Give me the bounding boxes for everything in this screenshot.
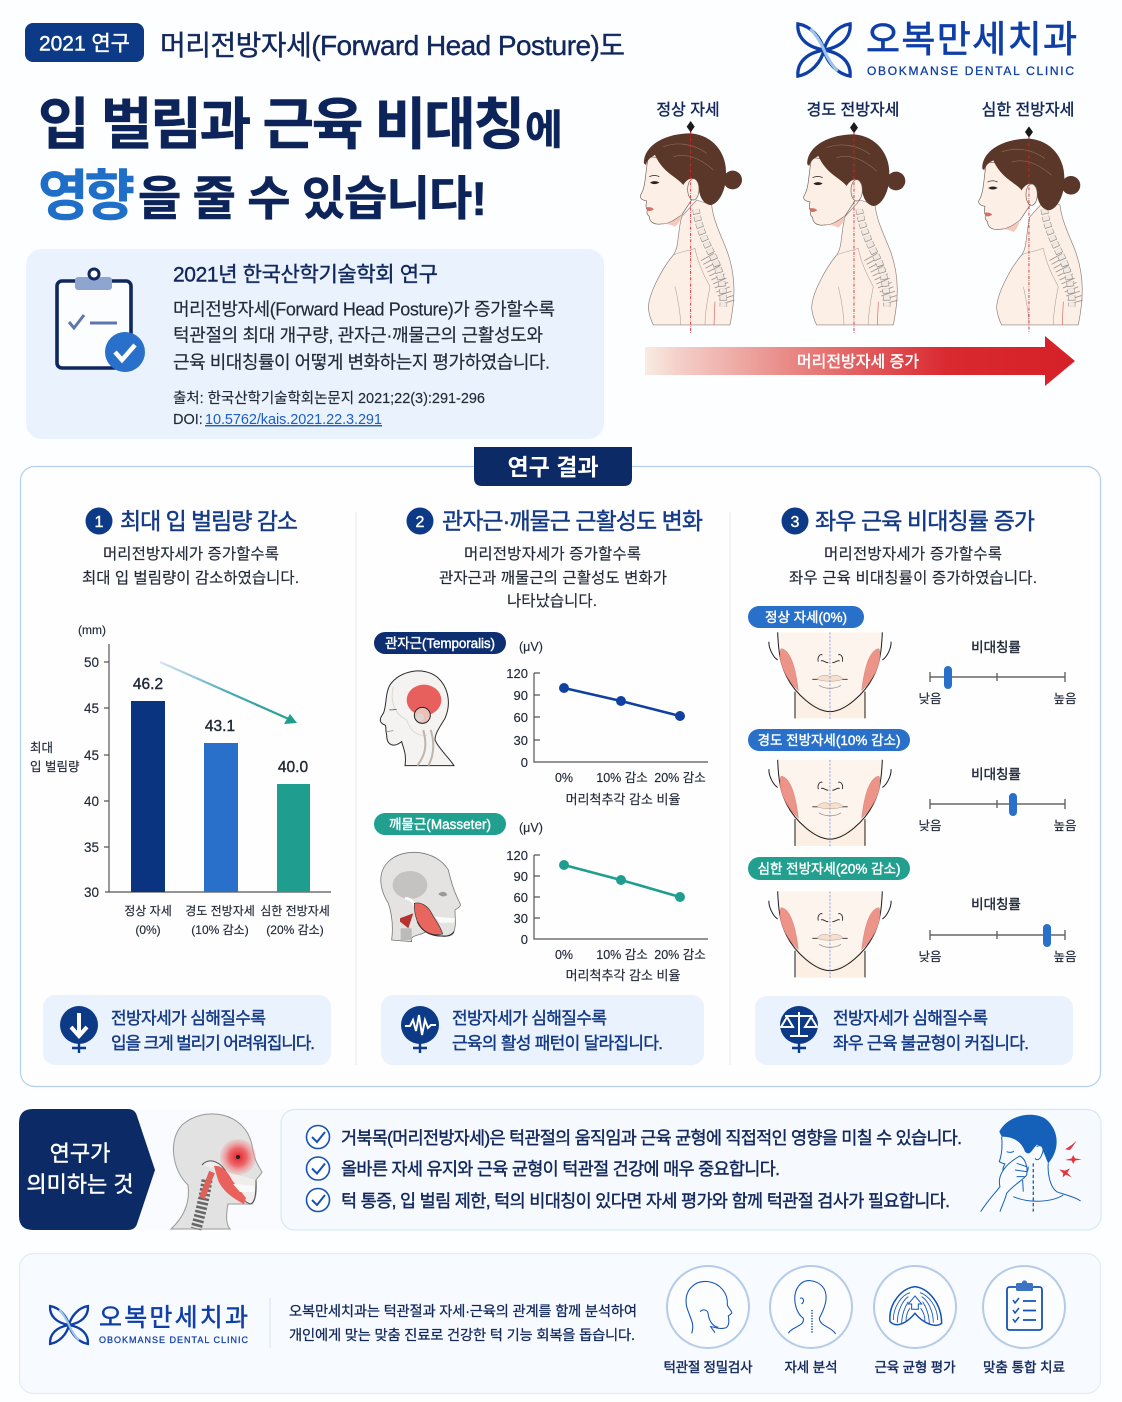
line chart: masseter: (μV) <box>519 821 543 835</box>
service: posture analysis <box>770 1266 852 1375</box>
bar chart: (20% 감소) <box>266 923 324 937</box>
line chart: masseter: 머리척추각 감소 비율 <box>566 968 680 983</box>
panel: takeaways <box>281 1110 1101 1230</box>
callout <box>43 995 331 1065</box>
heading: 최대 입 벌림량 감소 <box>120 508 298 534</box>
bar chart: 46.2 <box>133 676 163 693</box>
line chart: temporalis: (μV) <box>519 640 543 654</box>
pill <box>748 729 910 751</box>
callout: 전방자세가 심해질수록 <box>833 1009 988 1028</box>
icon: down arrow <box>60 1006 98 1053</box>
logo: top right: OBOKMANSE DENTAL CLINIC <box>867 64 1074 78</box>
asymmetry scale: 낮음 <box>918 692 942 706</box>
bar chart: (10% 감소) <box>191 923 249 937</box>
line chart: temporalis: 20% 감소 <box>654 771 706 785</box>
checklist <box>306 1126 962 1212</box>
label: 경도 전방자세: 경도 전방자세 <box>807 101 899 119</box>
face <box>769 891 891 978</box>
arrow: decreasing trend <box>160 662 297 724</box>
subtitle: 머리전방자세(Forward Head Posture)도 <box>160 30 625 61</box>
logo: footer: OBOKMANSE DENTAL CLINIC <box>99 1335 248 1345</box>
bar chart: 45 <box>84 748 99 763</box>
service: integrated treatment: 맞춤 통합 치료 <box>983 1360 1065 1375</box>
service: muscle balance <box>874 1266 956 1375</box>
pill: temporalis: 관자근(Temporalis) <box>385 636 495 651</box>
pill: 경도 전방자세(10% 감소) <box>758 733 900 748</box>
asymmetry scale <box>918 767 1077 833</box>
main title: 입 벌림과 근육 비대칭 <box>38 93 525 156</box>
bar chart: 43.1 <box>205 718 235 735</box>
bar chart: (0%) <box>135 923 161 937</box>
logo: footer <box>50 1304 248 1345</box>
bar chart: (mm) <box>78 623 106 637</box>
icon: head outline <box>667 1266 749 1348</box>
line chart: temporalis: 0% <box>555 771 573 785</box>
bar chart: 50 <box>84 655 99 670</box>
logo: footer: 오복만세치과 <box>99 1304 248 1332</box>
description: 머리전방자세가 증가할수록 <box>464 545 641 563</box>
description: 나타났습니다. <box>507 592 597 610</box>
service: posture analysis: 자세 분석 <box>784 1360 838 1375</box>
item 3: 턱 통증, 입 벌림 제한, 턱의 비대칭이 있다면 자세 평가와 함께 턱관절 검사가 필요합니다. <box>341 1191 950 1211</box>
bar chart: 35 <box>84 840 99 855</box>
row: mild <box>748 729 1077 847</box>
icon: masseter skull <box>381 852 460 942</box>
section label: 의미하는 것 <box>26 1172 134 1197</box>
heading: 관자근·깨물근 근활성도 변화 <box>442 508 703 534</box>
badge: 2021 연구 <box>25 23 144 62</box>
bar chart: 입 벌림량 <box>30 760 80 774</box>
asymmetry scale <box>918 640 1077 706</box>
icon: balance scale <box>780 1006 818 1053</box>
main title: 을 줄 수 있습니다! <box>138 172 487 225</box>
callout: 전방자세가 심해질수록 <box>111 1009 266 1028</box>
pill: 심한 전방자세(20% 감소) <box>758 862 900 876</box>
asymmetry scale: 낮음 <box>918 950 942 964</box>
bar chart <box>30 623 331 937</box>
illustration: skull with jaw pain <box>171 1114 262 1229</box>
callout: 전방자세가 심해질수록 <box>452 1009 607 1028</box>
description: 머리전방자세가 증가할수록 <box>824 545 1002 563</box>
pill: masseter: 깨물근(Masseter) <box>389 817 491 832</box>
asymmetry scale: 비대칭률 <box>971 640 1021 655</box>
asymmetry scale: 높음 <box>1053 692 1077 706</box>
bar chart: 30 <box>84 885 99 900</box>
icon: muscle fans <box>874 1266 956 1348</box>
line chart: masseter: 90 <box>514 869 528 884</box>
label: 정상 자세: 정상 자세 <box>656 101 720 119</box>
line chart: masseter: 120 <box>506 848 528 863</box>
description <box>439 545 667 610</box>
source citation: DOI: <box>173 412 203 428</box>
section label <box>19 1109 155 1230</box>
arrow: forward head increase: 머리전방자세 증가 <box>797 353 919 371</box>
description: 머리전방자세가 증가할수록 <box>103 545 279 563</box>
results tab <box>474 447 632 486</box>
badge: 2021 연구: 2021 연구 <box>39 32 130 56</box>
asymmetry scale: 비대칭률 <box>971 767 1021 782</box>
panel body text: 근육 비대칭률이 어떻게 변화하는지 평가하였습니다. <box>173 352 550 372</box>
pill <box>748 857 910 880</box>
line chart: masseter: 10% 감소 <box>596 948 648 962</box>
row: normal posture <box>748 606 1077 719</box>
source citation <box>173 390 485 428</box>
main title: 에 <box>525 107 563 153</box>
clinic description: 개인에게 맞는 맞춤 진료로 건강한 턱 기능 회복을 돕습니다. <box>289 1327 635 1344</box>
face <box>769 760 891 847</box>
bar chart: 40.0 <box>278 759 308 776</box>
asymmetry scale: 높음 <box>1053 819 1077 833</box>
line chart: masseter <box>506 821 708 983</box>
description: 최대 입 벌림량이 감소하였습니다. <box>82 569 299 587</box>
description <box>82 545 299 587</box>
section label: 연구가 <box>50 1141 110 1166</box>
pill: 정상 자세(0%) <box>765 610 847 625</box>
callout <box>381 995 704 1065</box>
service: integrated treatment <box>983 1266 1065 1375</box>
pill: temporalis <box>374 632 506 654</box>
bar chart: 심한 전방자세 <box>260 904 330 918</box>
line chart: temporalis: 120 <box>506 666 528 681</box>
callout: 근육의 활성 패턴이 달라집니다. <box>452 1034 663 1053</box>
section: what the study means <box>19 1109 1101 1230</box>
line chart: temporalis: 30 <box>514 733 528 748</box>
figure: mild forward head <box>804 122 905 333</box>
icon: checklist clipboard <box>983 1266 1065 1348</box>
line chart: masseter: 30 <box>514 911 528 926</box>
posture comparison illustration <box>640 101 1082 386</box>
arrow: forward head increase <box>645 336 1075 386</box>
panel heading: 2021년 한국산학기술학회 연구 <box>173 264 438 286</box>
item 2: 올바른 자세 유지와 근육 균형이 턱관절 건강에 매우 중요합니다. <box>341 1159 780 1179</box>
figure: normal posture <box>640 121 742 333</box>
icon: waveform <box>401 1006 439 1053</box>
icon: neck spine <box>770 1266 852 1348</box>
bar chart: 40 <box>84 794 99 809</box>
panel: results <box>20 447 1100 1086</box>
line chart: temporalis: 0 <box>521 755 528 770</box>
panel body text: 턱관절의 최대 개구량, 관자근·깨물근의 근활성도와 <box>173 326 543 346</box>
logo: top right: 오복만세치과 <box>866 19 1077 60</box>
heading: 좌우 근육 비대칭률 증가 <box>815 508 1035 534</box>
source citation: 출처: 한국산학기술학회논문지 2021;22(3):291-296 <box>173 390 485 407</box>
bar chart: 최대 <box>30 741 53 755</box>
panel: study info <box>26 249 604 439</box>
asymmetry scale <box>918 897 1077 964</box>
item 1: 거북목(머리전방자세)은 턱관절의 움직임과 근육 균형에 직접적인 영향을 미칠 수 있습니다. <box>341 1128 962 1148</box>
bar chart: 45 <box>84 701 99 716</box>
asymmetry scale: 높음 <box>1053 950 1077 964</box>
source citation: 10.5762/kais.2021.22.3.291 <box>205 412 382 428</box>
main title <box>38 93 563 227</box>
icon: clipboard with check <box>57 269 145 372</box>
pill <box>748 606 864 628</box>
panel body text <box>173 300 555 372</box>
label: 심한 전방자세: 심한 전방자세 <box>982 101 1074 119</box>
callout: 입을 크게 벌리기 어려워집니다. <box>111 1034 315 1053</box>
face <box>769 632 891 719</box>
callout: 좌우 근육 불균형이 커집니다. <box>833 1034 1029 1053</box>
results tab: 연구 결과 <box>507 454 599 480</box>
clinic description <box>289 1303 637 1344</box>
asymmetry scale: 낮음 <box>918 819 942 833</box>
line chart: temporalis: 60 <box>514 710 528 725</box>
service: TMJ exam: 턱관절 정밀검사 <box>664 1360 753 1375</box>
line chart: temporalis: 90 <box>514 688 528 703</box>
heading: 3 <box>791 514 800 531</box>
panel body text: 머리전방자세(Forward Head Posture)가 증가할수록 <box>173 300 555 320</box>
column 1: max mouth opening <box>30 508 331 1065</box>
panel: clinic footer <box>20 1254 1100 1394</box>
icon: temporalis head <box>380 671 454 766</box>
bar chart: 경도 전방자세 <box>185 904 255 918</box>
line chart: temporalis: 머리척추각 감소 비율 <box>566 792 680 807</box>
main title: 영향 <box>38 165 135 227</box>
line chart: masseter: 0 <box>521 932 528 947</box>
service: TMJ exam <box>664 1266 753 1375</box>
line chart: masseter: 60 <box>514 890 528 905</box>
asymmetry scale: 비대칭률 <box>971 897 1021 912</box>
pill: masseter <box>374 813 506 835</box>
line chart: masseter: 20% 감소 <box>654 948 706 962</box>
clinic description: 오복만세치과는 턱관절과 자세·근육의 관계를 함께 분석하여 <box>289 1303 637 1320</box>
line chart: masseter: 0% <box>555 948 573 962</box>
figure: severe forward head <box>979 126 1082 333</box>
description: 좌우 근육 비대칭률이 증가하였습니다. <box>789 569 1037 587</box>
logo: top right <box>798 19 1077 78</box>
line chart: temporalis <box>506 640 708 807</box>
column 3: asymmetry <box>748 508 1077 1065</box>
row: severe <box>748 857 1077 978</box>
heading: 2 <box>416 514 425 531</box>
service: muscle balance: 근육 균형 평가 <box>874 1360 956 1375</box>
illustration: man holding jaw <box>981 1115 1082 1212</box>
bar chart: 정상 자세 <box>124 904 172 918</box>
callout <box>755 996 1073 1065</box>
heading: 1 <box>95 514 104 531</box>
line chart: temporalis: 10% 감소 <box>596 771 648 785</box>
description: 관자근과 깨물근의 근활성도 변화가 <box>439 569 667 587</box>
description <box>789 545 1037 587</box>
column 2: muscle activity <box>374 508 708 1065</box>
